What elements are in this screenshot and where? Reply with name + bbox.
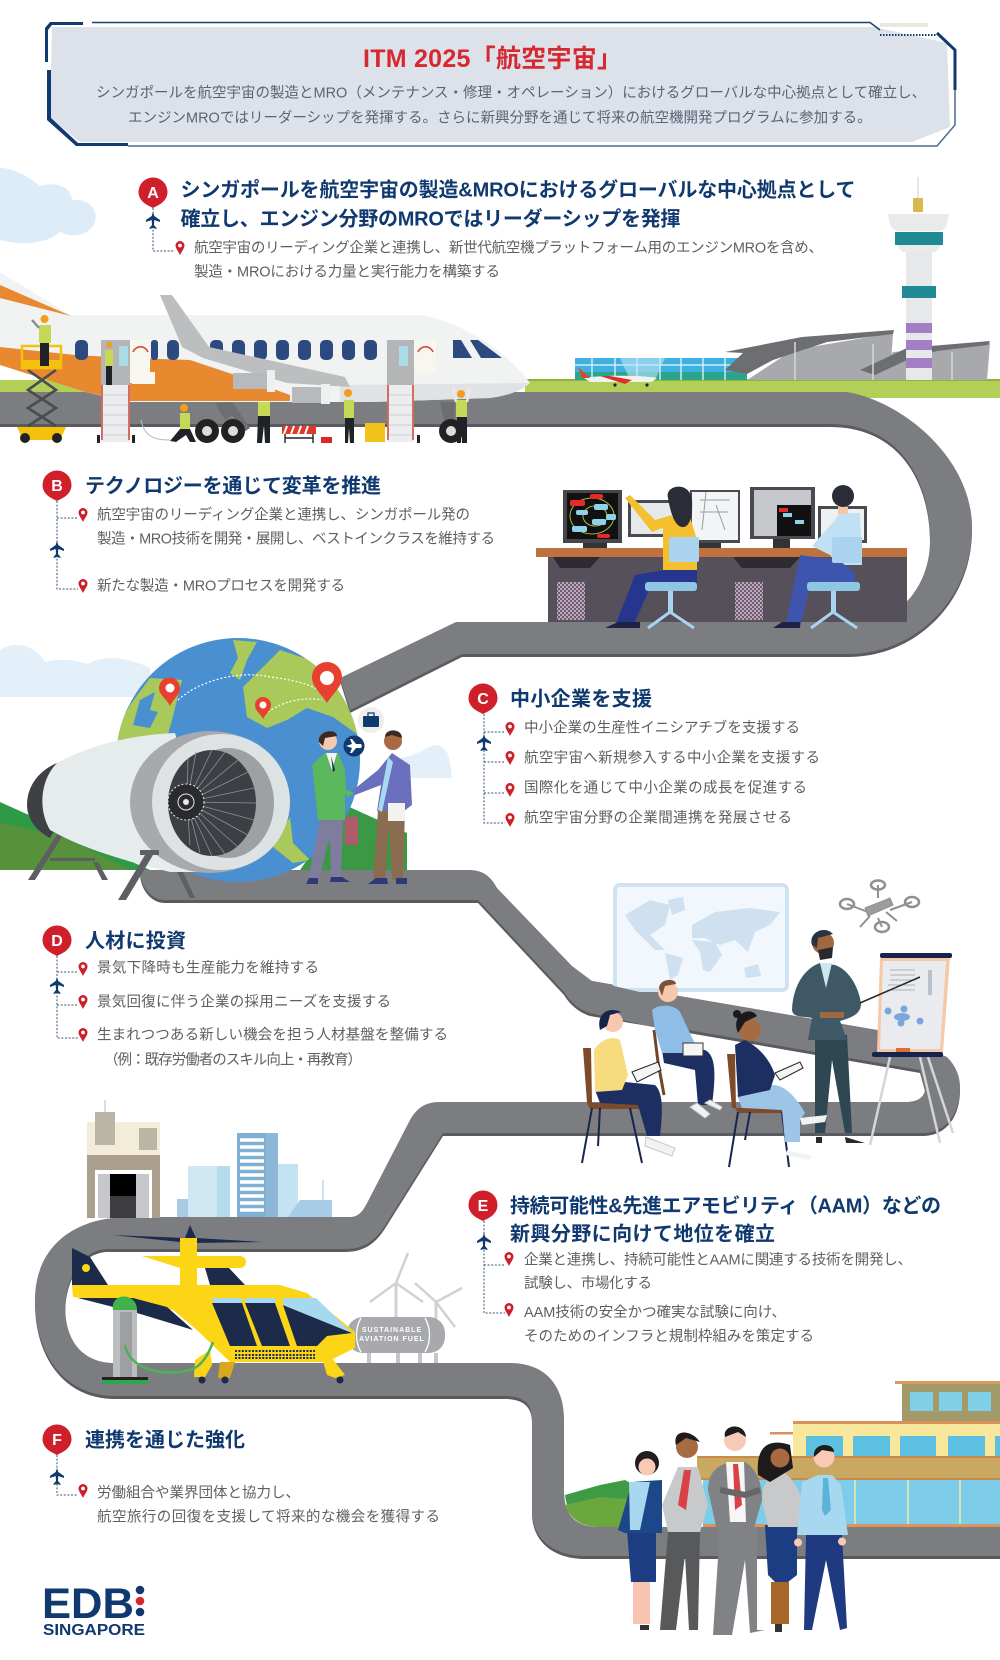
pointer	[860, 977, 920, 1003]
worker under wing	[257, 402, 270, 443]
pin B1	[78, 508, 88, 522]
section E	[468, 1190, 941, 1345]
boarding stairs rear	[387, 340, 436, 443]
man in blue jacket	[352, 730, 412, 884]
heading F: 連携を通じた強化	[85, 1428, 245, 1452]
connector F	[57, 1455, 78, 1495]
pin C3	[506, 783, 514, 797]
underside dark band	[78, 1298, 193, 1330]
heading A: 確立し、エンジン分野のMROではリーダーシップを発揮	[180, 206, 680, 230]
heading E: 持続可能性&先進エアモビリティ（AAM）などの	[510, 1194, 941, 1218]
windows	[75, 340, 502, 360]
badge D	[42, 926, 72, 956]
elevator building	[87, 1100, 160, 1218]
body E: 企業と連携し、持続可能性とAAMに関連する技術を開発し、	[524, 1252, 912, 1268]
engine mount front	[118, 850, 195, 900]
heading B: テクノロジーを通じて変革を推進	[85, 474, 381, 498]
tower	[888, 177, 949, 380]
rear wing	[142, 1238, 246, 1300]
green hills behind engine	[0, 802, 407, 870]
body E: AAM技術の安全かつ確実な試験に向け、	[524, 1304, 786, 1321]
scissor lift with worker	[17, 315, 66, 443]
connector A	[153, 208, 175, 251]
title: ITM 2025「航空宇宙」	[363, 45, 622, 73]
fuel tank: AVIATION FUEL	[359, 1336, 425, 1343]
road: lower section	[35, 870, 1000, 1559]
boarding stairs front	[97, 340, 155, 443]
man in green jacket	[306, 731, 355, 884]
heading A: シンガポールを航空宇宙の製造&MROにおけるグローバルな中心拠点として	[180, 178, 856, 202]
control room illustration	[536, 485, 907, 628]
badge C	[468, 684, 498, 714]
pin C1	[506, 722, 514, 736]
man in light-blue shirt	[794, 1445, 848, 1630]
cloud top-left	[0, 168, 96, 243]
badge F: F	[52, 1432, 62, 1449]
eVTOL aircraft and charging	[72, 1225, 462, 1384]
pin E2	[504, 1303, 514, 1317]
marshaller worker	[453, 388, 470, 443]
road: upper section	[0, 392, 972, 713]
body B: 新たな製造・MROプロセスを開発する	[97, 578, 345, 594]
routes	[178, 675, 325, 712]
connector C	[484, 714, 505, 823]
yellow cart	[365, 423, 385, 442]
badge E	[468, 1190, 498, 1221]
pin D3	[78, 1028, 88, 1042]
main rotor	[112, 1225, 263, 1243]
cloud mid-left	[0, 645, 150, 697]
man in grey suit	[708, 1426, 765, 1635]
tail fin stripe	[0, 285, 71, 316]
body F: 労働組合や業界団体と協力し、	[97, 1484, 300, 1502]
EDB Singapore logo: SINGAPORE	[43, 1622, 145, 1639]
pin D2	[78, 995, 88, 1009]
connector D	[57, 956, 78, 1038]
airport terminal and control tower	[575, 177, 990, 387]
body D: 景気回復に伴う企業の採用ニーズを支援する	[97, 994, 391, 1010]
heading E: 新興分野に向けて地位を確立	[510, 1222, 775, 1246]
heading C: 中小企業を支援	[510, 688, 652, 710]
body F: 航空旅行の回復を支援して将来的な機会を獲得する	[97, 1508, 440, 1526]
badge B	[42, 470, 72, 501]
body B: 航空宇宙のリーディング企業と連携し、シンガポール発の	[97, 506, 470, 524]
plane marker D	[50, 977, 64, 994]
plane marker E	[477, 1233, 491, 1250]
elevator building and city skyline	[87, 1100, 332, 1218]
wing engines	[233, 370, 330, 404]
wind turbines	[370, 1253, 462, 1327]
grass strip	[0, 379, 1000, 398]
aircraft under maintenance	[0, 272, 530, 443]
city buildings	[177, 1133, 332, 1217]
orange livery	[0, 347, 290, 401]
pin F	[78, 1484, 88, 1498]
pin small	[255, 697, 271, 719]
kneeling worker	[141, 404, 196, 442]
section B	[42, 470, 495, 594]
section A	[138, 178, 856, 280]
pin A	[176, 241, 184, 255]
body D: （例：既存労働者のスキル向上・再教育）	[104, 1052, 362, 1068]
presenter	[792, 930, 865, 1143]
pin B2	[78, 579, 88, 593]
badge A: A	[147, 185, 159, 202]
briefcase icon	[358, 707, 384, 733]
body E: 試験し、市場化する	[524, 1275, 652, 1292]
section C	[468, 684, 820, 827]
pin large	[312, 662, 342, 703]
badge D: D	[51, 933, 63, 950]
worker in door	[105, 342, 113, 385]
fuel tank: SUSTAINABLE	[362, 1327, 422, 1334]
connector B	[57, 501, 78, 589]
fuselage yellow	[72, 1285, 355, 1362]
attendee yellow shirt	[582, 1010, 675, 1163]
barrier	[282, 426, 316, 443]
globe with route pins	[108, 638, 365, 882]
building and hills	[565, 1381, 1000, 1527]
desk	[536, 548, 907, 622]
five professionals	[618, 1426, 848, 1635]
fuselage	[0, 272, 530, 402]
body C: 航空宇宙分野の企業間連携を発展させる	[524, 810, 792, 826]
badge F	[42, 1424, 72, 1455]
waste bins	[557, 582, 763, 620]
pin D1	[78, 962, 88, 976]
section D	[42, 926, 448, 1068]
plane marker C	[477, 734, 491, 751]
world map board	[615, 885, 787, 990]
small aircraft	[578, 367, 657, 387]
terminal wings	[725, 330, 990, 380]
nacelle	[42, 733, 213, 872]
vent dots	[235, 1351, 315, 1358]
body D: 景気下降時も生産能力を維持する	[97, 960, 319, 976]
cockpit windows	[212, 1298, 352, 1346]
badge B: B	[51, 478, 63, 495]
badge A	[138, 178, 168, 208]
fuselage lower shade	[340, 383, 530, 402]
engine illustration	[27, 731, 290, 900]
attendee blue sweater	[652, 980, 722, 1118]
handshake figures	[306, 730, 412, 884]
fuel tank	[347, 1317, 445, 1363]
body C: 国際化を通じて中小企業の成長を促進する	[524, 780, 807, 796]
training session figures	[582, 930, 953, 1167]
EDB Singapore logo: EDB	[42, 1580, 134, 1628]
badge E: E	[478, 1198, 489, 1215]
heading D: 人材に投資	[85, 930, 186, 952]
worker with tablet	[344, 389, 354, 443]
body B: 製造・MRO技術を開発・展開し、ベストインクラスを維持する	[97, 530, 495, 548]
tool box	[321, 437, 332, 443]
body A: 航空宇宙のリーディング企業と連携し、新世代航空機プラットフォーム用のエンジンMROを含め、	[194, 238, 823, 256]
landing skids	[194, 1350, 345, 1378]
connector E	[484, 1221, 505, 1313]
drone	[840, 880, 919, 932]
inlet ring	[130, 731, 290, 873]
fan	[168, 750, 256, 856]
man with red tie	[660, 1433, 708, 1630]
woman in grey blouse	[758, 1443, 804, 1632]
engine mount rear	[28, 829, 108, 880]
pin medium	[159, 677, 180, 706]
briefcase in hand	[345, 817, 358, 845]
plane marker B	[50, 541, 64, 558]
pin E1	[504, 1252, 514, 1266]
exhaust	[27, 763, 60, 838]
operator woman	[605, 487, 699, 628]
charging station	[102, 1296, 213, 1384]
body D: 生まれつつある新しい機会を担う人材基盤を整備する	[97, 1026, 448, 1044]
pin C2	[506, 751, 514, 765]
plane icon	[344, 736, 364, 756]
header description: エンジンMROではリーダーシップを発揮する。さらに新興分野を通じて将来の航空機開発プログラムに参加する。	[128, 110, 872, 126]
landing gear	[195, 402, 463, 443]
plane marker A	[146, 212, 160, 229]
road band in front of map	[572, 981, 880, 1046]
plane marker F	[50, 1468, 64, 1485]
body A: 製造・MROにおける力量と実行能力を構築する	[194, 262, 500, 280]
monitors	[563, 487, 867, 548]
pin C4	[506, 813, 514, 827]
woman in navy jacket	[618, 1451, 662, 1630]
body C: 中小企業の生産性イニシアチブを支援する	[524, 718, 800, 736]
body E: そのためのインフラと規制枠組みを策定する	[524, 1328, 814, 1345]
wing	[160, 295, 350, 387]
section F	[42, 1424, 440, 1526]
header description: シンガポールを航空宇宙の製造とMRO（メンテナンス・修理・オペレーション）におけるグローバルな中心拠点として確立し、	[96, 84, 926, 102]
attendee navy top	[727, 1010, 827, 1167]
cloud mid-right	[400, 745, 452, 778]
glass concourse	[575, 358, 747, 380]
flip chart	[870, 953, 953, 1145]
operator man	[773, 485, 862, 628]
header panel	[45, 22, 955, 146]
tail fin	[72, 1248, 108, 1285]
body C: 航空宇宙へ新規参入する中小企業を支援する	[524, 750, 820, 766]
badge C: C	[477, 691, 489, 708]
